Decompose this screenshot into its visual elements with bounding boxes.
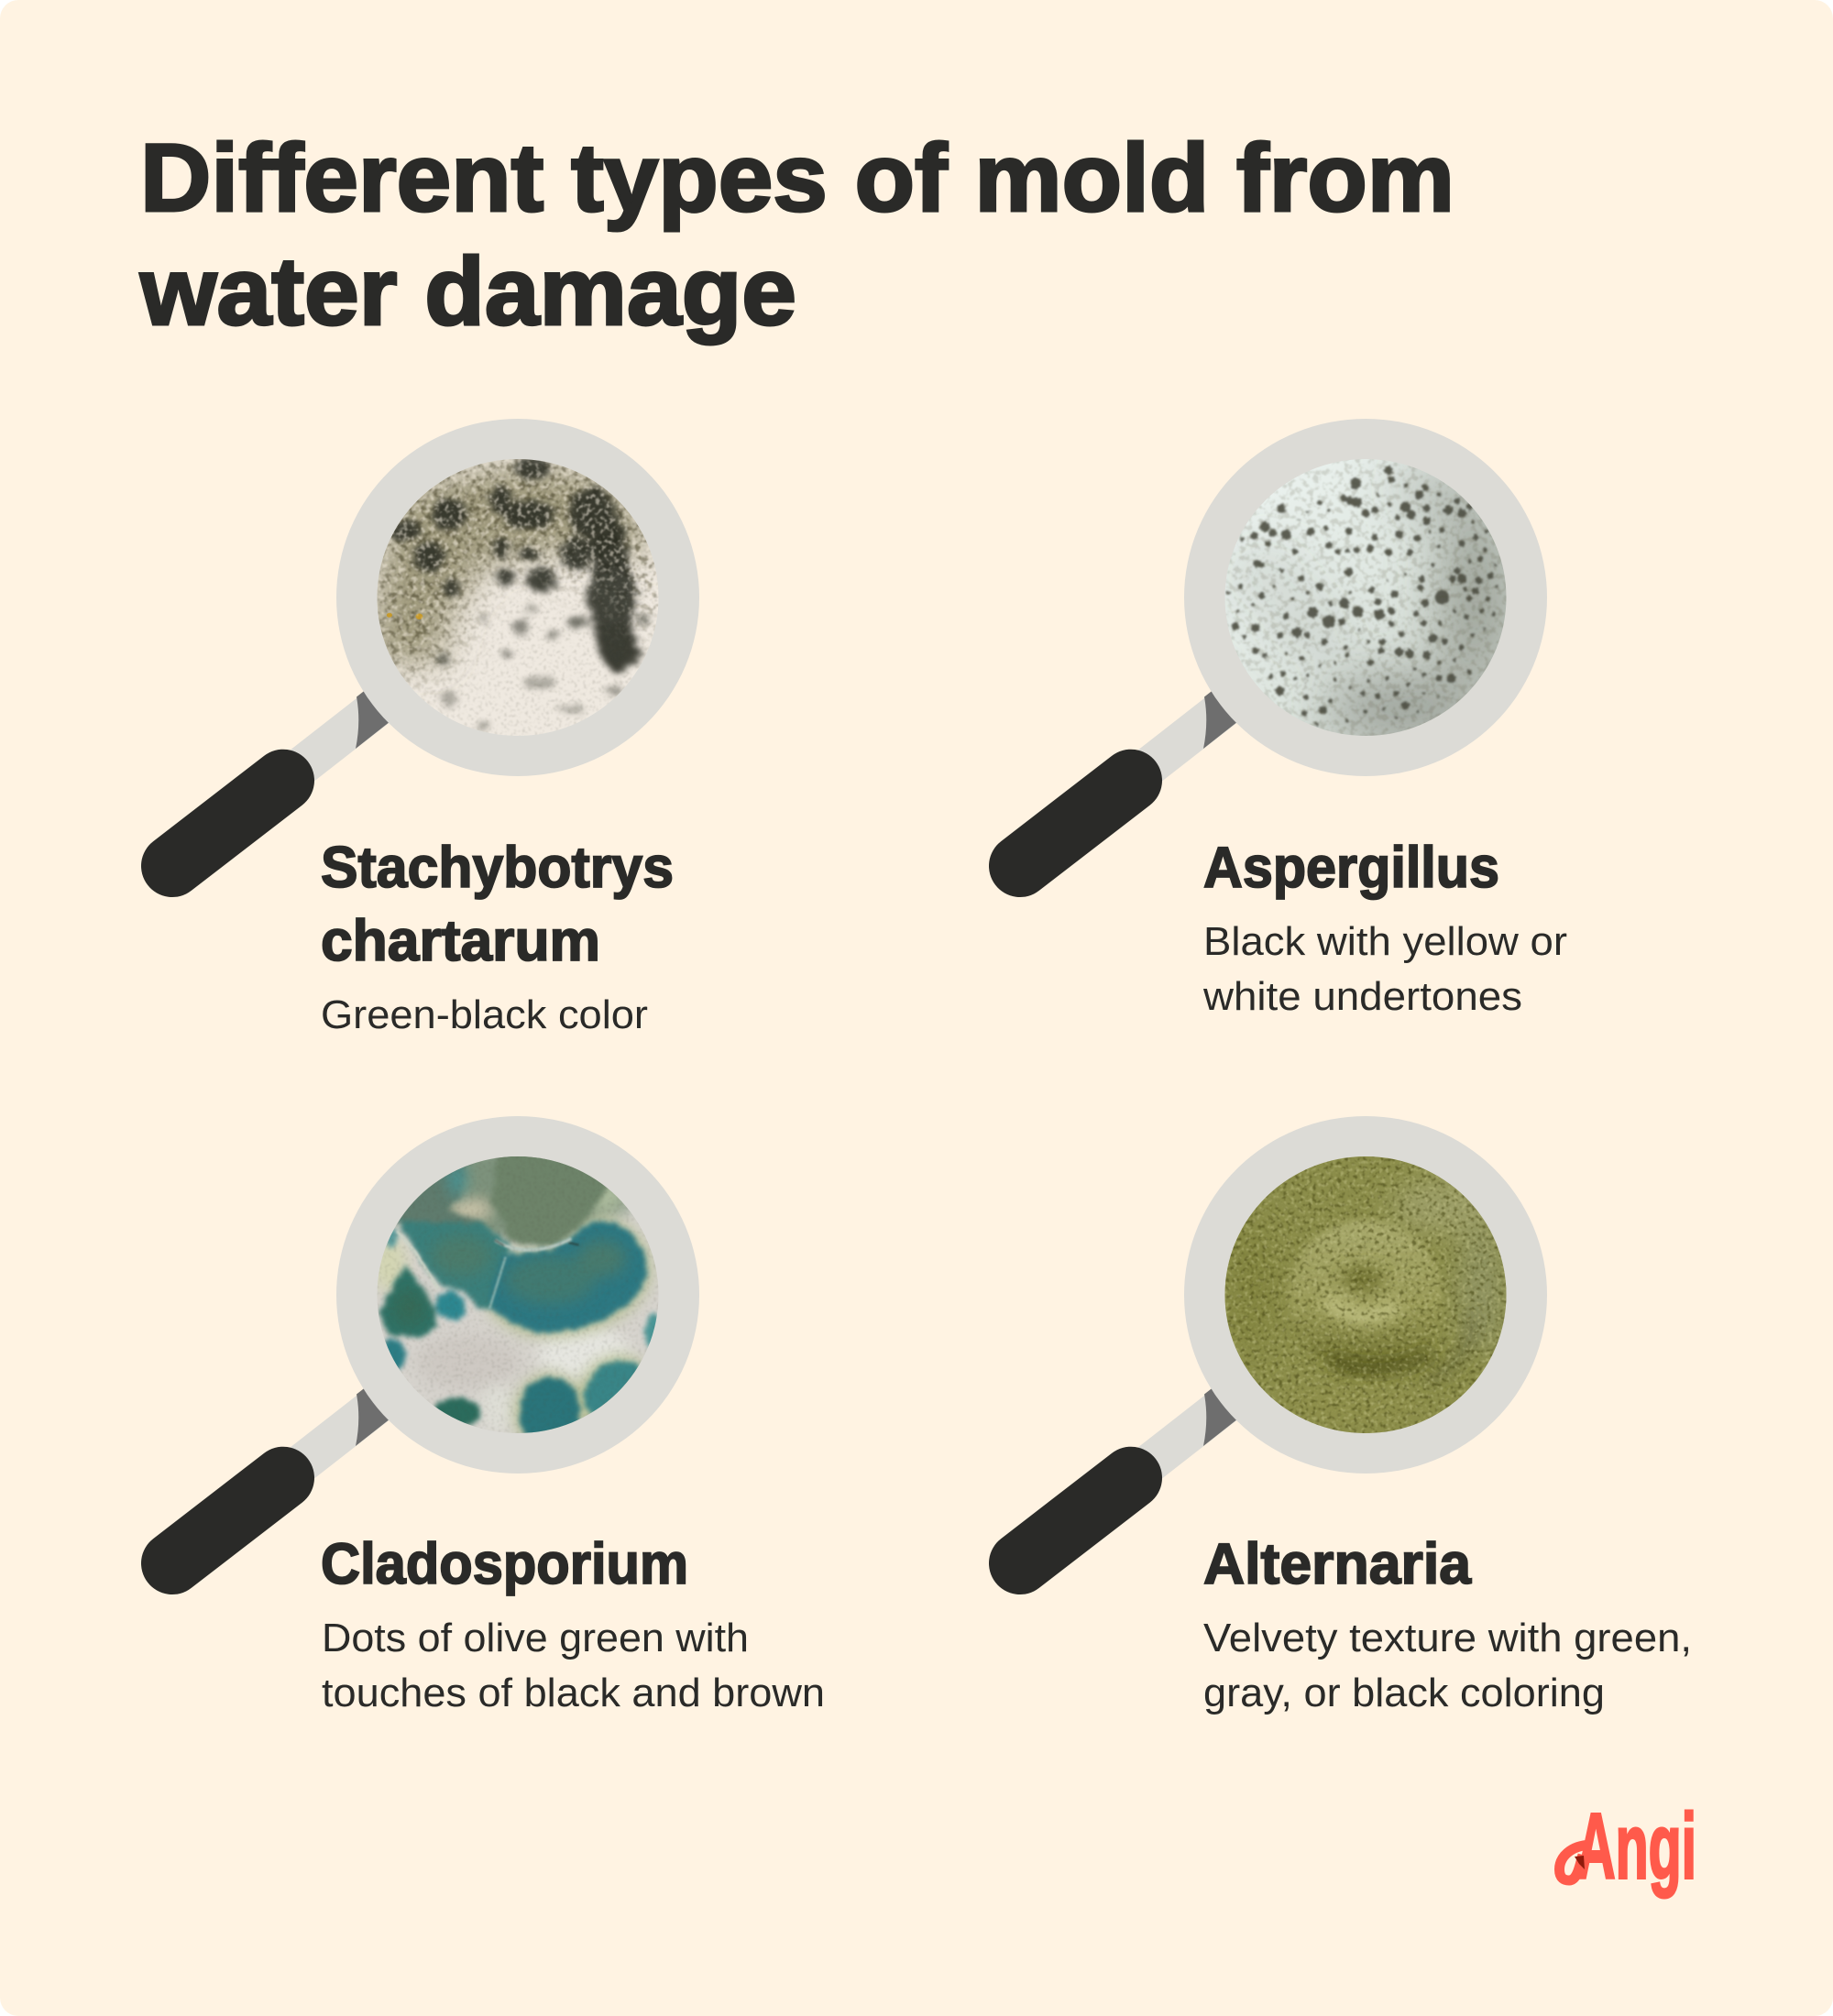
description <box>1202 919 1567 1019</box>
heading: Cladosporium <box>321 1532 688 1596</box>
description <box>1203 1616 1692 1715</box>
magnifier handle <box>1020 661 1251 866</box>
magnifier ring <box>1184 419 1547 776</box>
title: Different types of mold from <box>140 125 1454 232</box>
title <box>139 125 1454 345</box>
icon: magnifying glass with Cladosporium mold <box>172 1116 699 1563</box>
mold image: dark dots on pale ground <box>1219 454 1515 742</box>
logo: Angi: Angi <box>1576 1796 1696 1899</box>
panel: Stachybotrys chartarum <box>172 419 699 1037</box>
icon: magnifying glass with Alternaria mold <box>1020 1116 1547 1563</box>
description: white undertones <box>1202 974 1522 1019</box>
heading: Alternaria <box>1203 1532 1472 1596</box>
description: Velvety texture with green, <box>1203 1616 1692 1660</box>
mold image: velvety olive colony <box>1219 1150 1512 1439</box>
magnifier ring <box>336 419 699 776</box>
title: water damage <box>139 238 796 345</box>
magnifier handle <box>172 1358 403 1563</box>
description: Green-black color <box>321 992 648 1037</box>
magnifier handle <box>172 661 403 866</box>
heading: Stachybotrys <box>321 836 674 900</box>
heading: Aspergillus <box>1203 836 1499 900</box>
panel: Aspergillus <box>1020 419 1567 1019</box>
heading <box>321 836 674 973</box>
magnifier handle <box>1020 1358 1251 1563</box>
description <box>322 1616 825 1715</box>
description: gray, or black coloring <box>1203 1671 1605 1715</box>
description: Black with yellow or <box>1203 919 1567 964</box>
icon: magnifying glass with Aspergillus mold <box>1020 419 1547 866</box>
magnifier ring <box>1184 1116 1547 1474</box>
mold image: green-black speckled <box>378 459 658 736</box>
heading: chartarum <box>321 909 600 973</box>
icon: magnifying glass with Stachybotrys mold <box>172 419 699 866</box>
panel: Cladosporium <box>172 1116 825 1715</box>
mold image: teal and olive patches <box>378 1156 658 1433</box>
magnifier ring <box>336 1116 699 1474</box>
description: Dots of olive green with <box>322 1616 749 1660</box>
panel: Alternaria <box>1020 1116 1692 1715</box>
logo: Angi <box>1560 1796 1696 1899</box>
description: touches of black and brown <box>322 1671 825 1715</box>
